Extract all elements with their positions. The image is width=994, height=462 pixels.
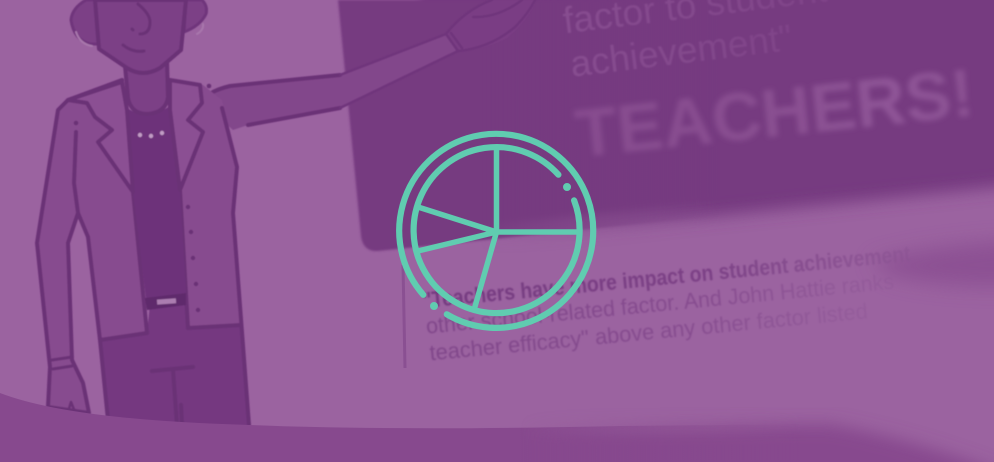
blurred dark patch on right side bbox=[870, 240, 994, 286]
shirt bbox=[127, 106, 186, 299]
pie spokes bbox=[418, 150, 577, 310]
necklace bbox=[138, 131, 164, 138]
ring dots bbox=[564, 184, 570, 190]
nose bbox=[132, 4, 150, 34]
hand bbox=[446, 0, 536, 52]
caption text: "Teachers have more impact on student achievement bbox=[421, 241, 912, 313]
smile bbox=[123, 45, 144, 51]
neck bbox=[125, 60, 168, 114]
belt bbox=[145, 293, 186, 310]
pants bbox=[100, 300, 249, 430]
bottom curved band bbox=[0, 393, 994, 462]
jacket right front bbox=[170, 80, 241, 328]
left lapel bbox=[68, 82, 133, 192]
wrist cuff bbox=[52, 357, 72, 369]
jacket and left arm bbox=[37, 80, 147, 413]
caption text: other school-related factor. And John Hattie ranks bbox=[425, 269, 895, 339]
jacket buttons bbox=[186, 205, 200, 312]
caption text: teacher efficacy" above any other factor listed bbox=[428, 298, 869, 366]
hair left bbox=[71, 0, 100, 44]
hand fingers bbox=[68, 402, 75, 412]
caption text bbox=[421, 241, 917, 366]
slide text: quote bbox=[561, 0, 835, 85]
teacher figure bbox=[37, 0, 536, 430]
pants seams bbox=[100, 340, 193, 425]
pointing arm bbox=[200, 34, 458, 130]
slide text: quote: achievement" bbox=[568, 17, 794, 85]
inner ring bbox=[414, 147, 580, 313]
jacket right side outline bbox=[180, 108, 249, 425]
belt buckle bbox=[157, 298, 176, 305]
earrings bbox=[76, 24, 203, 46]
pie chart icon bbox=[399, 134, 593, 328]
outer ring bbox=[399, 134, 593, 328]
face bbox=[95, 0, 186, 73]
pointing arm outline bbox=[203, 75, 340, 125]
slide text: TEACHERS: TEACHERS! bbox=[572, 55, 977, 172]
hair right bbox=[184, 0, 206, 32]
caption beneath the slide bbox=[403, 241, 917, 368]
left inner sleeve bbox=[74, 132, 78, 213]
caption rule bbox=[403, 265, 405, 368]
right lapel bbox=[170, 80, 203, 190]
presentation slide panel bbox=[338, 0, 994, 251]
